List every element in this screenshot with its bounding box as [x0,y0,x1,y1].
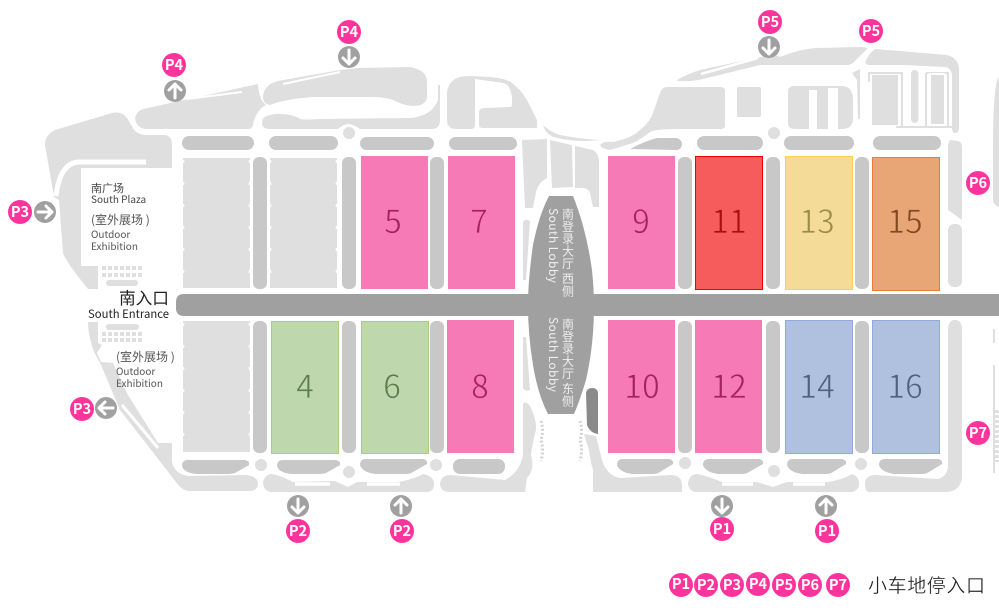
lobby upper pieces [522,139,547,208]
hall 10 [608,320,675,453]
hall 13 [786,156,852,290]
hall 4 [272,322,338,454]
marker: P1 down [710,495,734,541]
lower outdoor exhibition label [116,348,175,390]
north east ground [600,87,725,150]
vertical service pills [253,157,869,453]
lobby west Chinese label: 南登录大厅 西侧 [560,207,576,297]
north lobby block [447,76,537,129]
outdoor exhibition dots [102,268,144,340]
dark entrance pill [586,388,598,434]
hall 8: 8 [471,362,489,408]
lobby east Chinese label: 南登录大厅 东侧 [560,317,576,407]
horizontal service pills [182,136,942,474]
hall 10: 10 [624,362,660,408]
marker: P4 north: P4 [340,21,359,42]
round planters [343,127,355,139]
south plaza label [91,180,150,253]
legend: car parking entrance: P6 [801,574,819,595]
hall 12 [695,320,762,453]
marker: P4 north [337,20,361,68]
lower outdoor exhibition label: Outdoor [116,363,155,378]
site grounds and roads [45,47,999,492]
marker: P6 [966,171,990,195]
marker: P4 north west [162,53,186,102]
legend: car parking entrance [669,571,985,598]
marker: P5 north: P5 [761,11,779,32]
marker: P3 west lower: P3 [73,398,91,419]
hall 6: 6 [383,362,401,408]
unassigned grey halls [183,158,337,452]
hall 15 [872,158,940,290]
hall 5 [361,156,428,289]
marker: P3 west upper [8,200,56,224]
hall 16 [872,320,940,454]
hall 9: 9 [632,197,650,243]
hall 9 [608,156,675,289]
lobby dotted planters [541,421,582,461]
south band ground [263,474,434,492]
south plaza label: (室外展场 ) [91,211,150,228]
hall 8 [447,320,514,453]
north east corner block [865,49,959,133]
legend: car parking entrance: P7 [829,574,847,595]
marker: P2 up: P2 [393,520,411,541]
marker: P3 west upper: P3 [11,201,29,222]
lobby west English label: South Lobby [545,208,562,284]
north centre ground [263,67,427,106]
legend: car parking entrance: P1 [672,573,690,594]
north west ground [135,84,266,129]
marker: P7: P7 [969,422,987,443]
lower outdoor exhibition label: (室外展场 ) [116,348,175,365]
south plaza label: 南广场 [91,180,124,196]
hall 16: 16 [887,362,923,408]
hall 7: 7 [470,197,488,243]
legend: car parking entrance: 小车地停入口 [868,571,985,598]
south plaza label: Exhibition [91,238,138,253]
marker: P1 up [815,495,839,543]
marker: P2 up [390,495,414,543]
marker: P5 north east [859,19,883,43]
legend: car parking entrance: P4 [749,573,768,594]
marker: P5 north east: P5 [862,20,880,41]
hall 13: 13 [799,197,835,243]
legend: car parking entrance: P5 [775,574,793,595]
south plaza label: Outdoor [91,226,130,241]
hall 4: 4 [296,362,314,408]
hall 11 [696,156,762,290]
south lobby [528,196,594,414]
marker: P1 up: P1 [818,520,836,541]
marker: P2 down: P2 [289,520,307,541]
marker: P2 down [286,495,310,543]
hall 7 [448,156,515,289]
hall 14: 14 [799,362,835,408]
south entrance label: South Entrance [88,306,169,322]
hall 11: 11 [711,197,747,243]
south entrance label: 南入口 [119,285,169,309]
legend: car parking entrance: P3 [723,574,741,595]
marker: P7 [966,421,990,445]
south entrance label [88,285,169,322]
legend: car parking entrance: P2 [697,574,715,595]
south west ground [88,322,258,491]
marker: P5 north [758,10,782,58]
hall 12: 12 [711,362,747,408]
lower outdoor exhibition label: Exhibition [116,375,163,390]
south plaza ground [45,113,172,289]
hall 14 [786,320,852,454]
hall 5: 5 [384,197,402,243]
hall 15: 15 [887,197,923,243]
marker: P1 down: P1 [713,518,731,539]
east ground [948,140,962,220]
marker: P3 west lower [70,397,117,421]
lobby east English label: South Lobby [545,317,562,393]
south plaza label: South Plaza [91,191,146,206]
central concourse road [176,294,999,316]
marker: P4 north west: P4 [165,54,184,75]
marker: P6: P6 [969,172,987,193]
hall 6 [362,322,428,454]
